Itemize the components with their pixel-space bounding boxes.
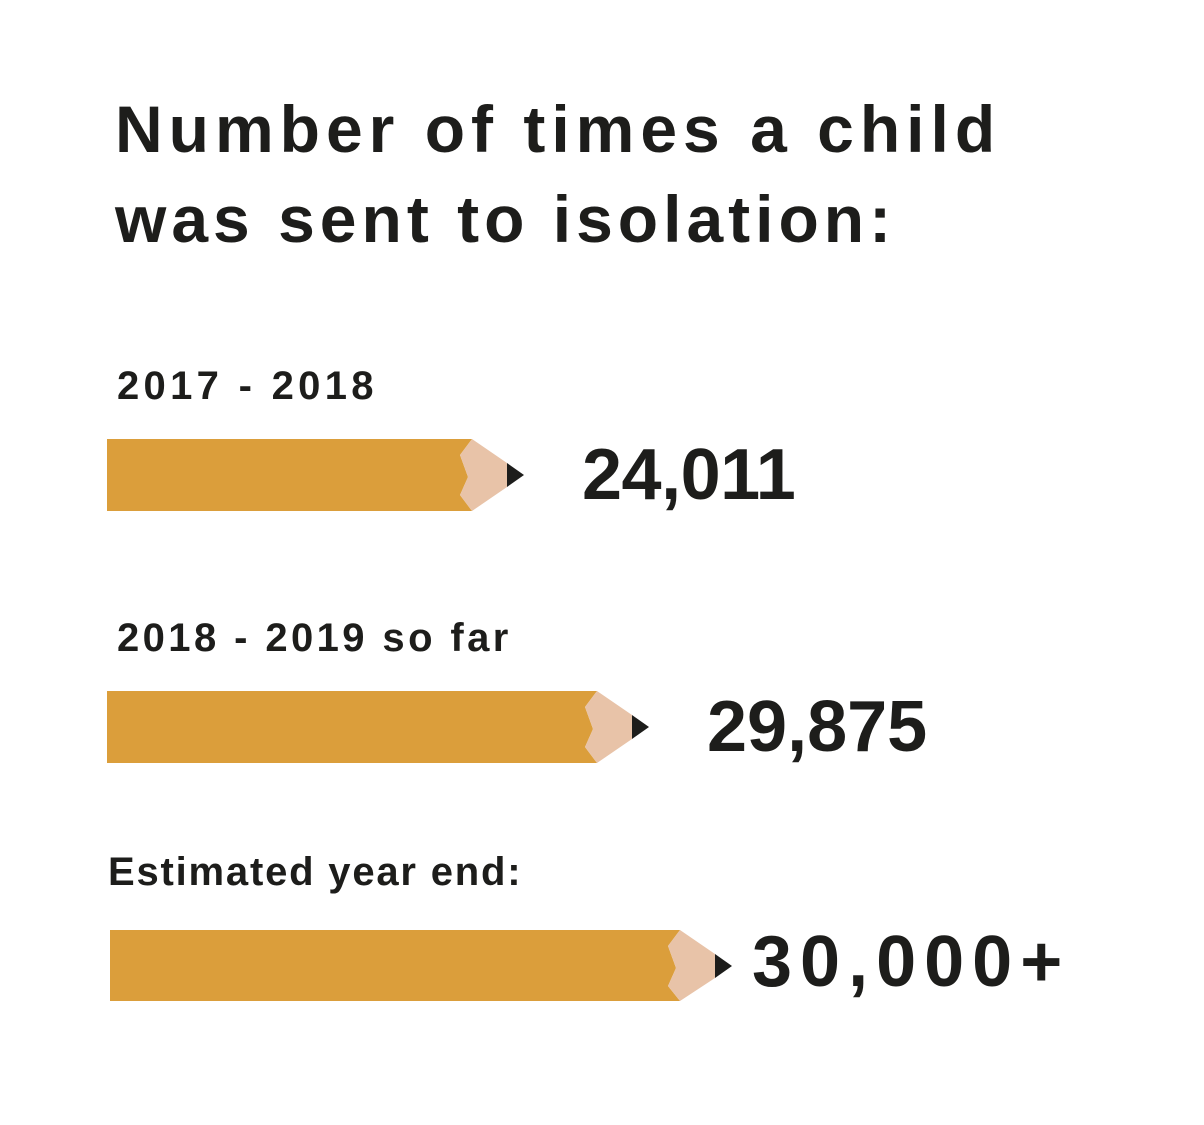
- title: Number of times a child: [115, 92, 1001, 166]
- label: 2017 - 2018: 2017 - 2018: [117, 364, 378, 408]
- pencil bar 3: [110, 930, 732, 1001]
- title: [114, 92, 1001, 256]
- label: estimated year end: Estimated year end:: [108, 850, 522, 894]
- value: 29,875: 29,875: [707, 687, 927, 767]
- pencil bar 1: [107, 439, 524, 511]
- value: 24,011: 24,011: [582, 435, 795, 515]
- value: 30,000+: 30,000+: [752, 922, 1070, 1002]
- title: was sent to isolation:: [115, 182, 896, 256]
- pencil bar 2: [107, 691, 649, 763]
- label: 2018 - 2019 so far: 2018 - 2019 so far: [117, 616, 512, 660]
